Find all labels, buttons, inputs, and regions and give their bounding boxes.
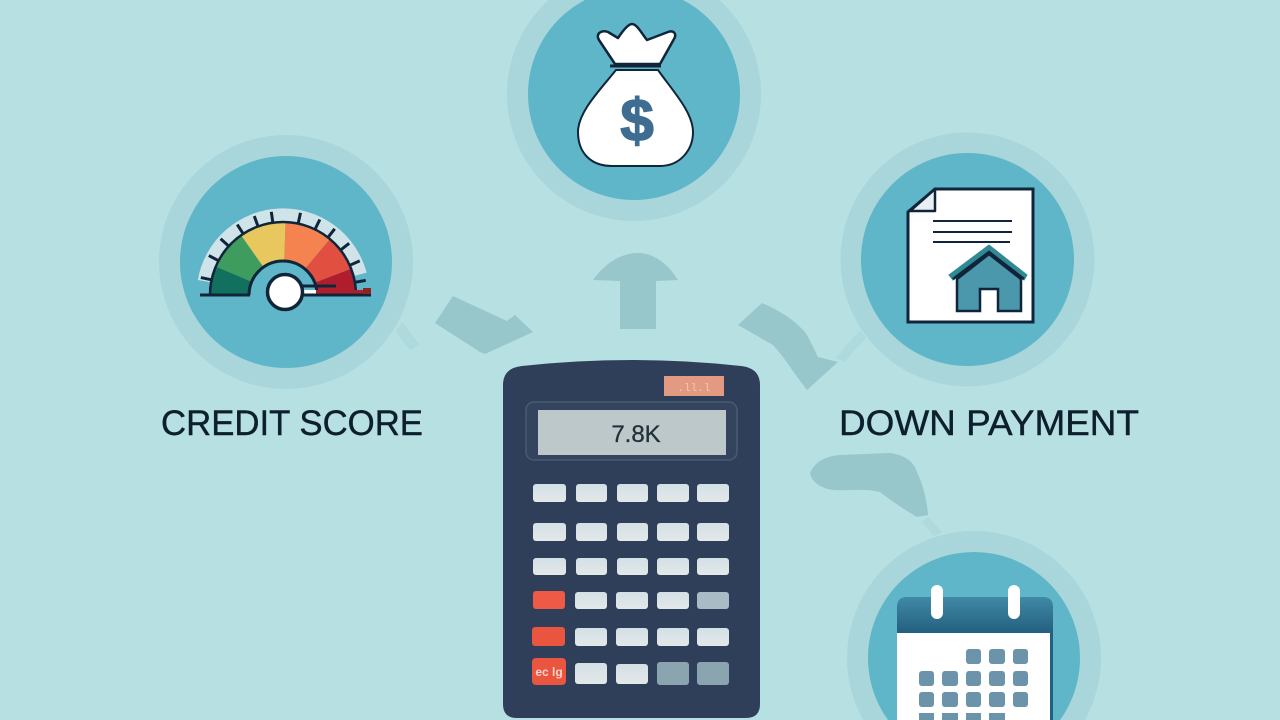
money bag tie: [610, 64, 661, 68]
calculator display: [538, 410, 726, 455]
panel: calendar icon: [847, 531, 1101, 720]
panel: money bag icon: [507, 0, 761, 221]
gauge base line: [200, 294, 250, 296]
house icon: [949, 245, 1027, 311]
money bag knot: [598, 24, 675, 64]
calendar day grid: [919, 649, 1028, 720]
calculator: [503, 360, 760, 718]
calendar ring left: [931, 585, 943, 619]
gauge tick band: [201, 212, 366, 282]
calendar header: [897, 597, 1053, 633]
calculator body: [503, 360, 760, 718]
money bag body: [578, 70, 693, 166]
calendar body: [897, 630, 1050, 720]
panel: credit score icon: [159, 135, 413, 389]
document fold: [910, 189, 935, 211]
calculator display value: 7.8K: [611, 421, 661, 448]
heading: down payment: DOWN PAYMENT: [839, 404, 1139, 443]
heading: credit score: CREDIT SCORE: [161, 404, 423, 443]
calculator keys: [533, 484, 729, 685]
document text lines: [933, 221, 1012, 242]
panel: down payment icon: [840, 132, 1094, 386]
calculator label: .ll.l: [677, 383, 711, 395]
red keys: [532, 591, 566, 685]
gauge needle: [268, 274, 371, 310]
arrow: calendar to calculator: [810, 453, 942, 536]
calendar ring right: [1008, 585, 1020, 619]
gauge segments: [210, 222, 356, 295]
calculator label: [664, 376, 724, 396]
arrow: down payment to calculator: [738, 303, 866, 390]
red keys: ec lg: [535, 665, 563, 679]
arrow: credit score to calculator: [396, 296, 533, 354]
calculator display frame: [526, 402, 737, 460]
arrow: money bag to calculator: [593, 253, 678, 329]
document page: [908, 189, 1033, 322]
dollar sign: $: [620, 87, 654, 154]
